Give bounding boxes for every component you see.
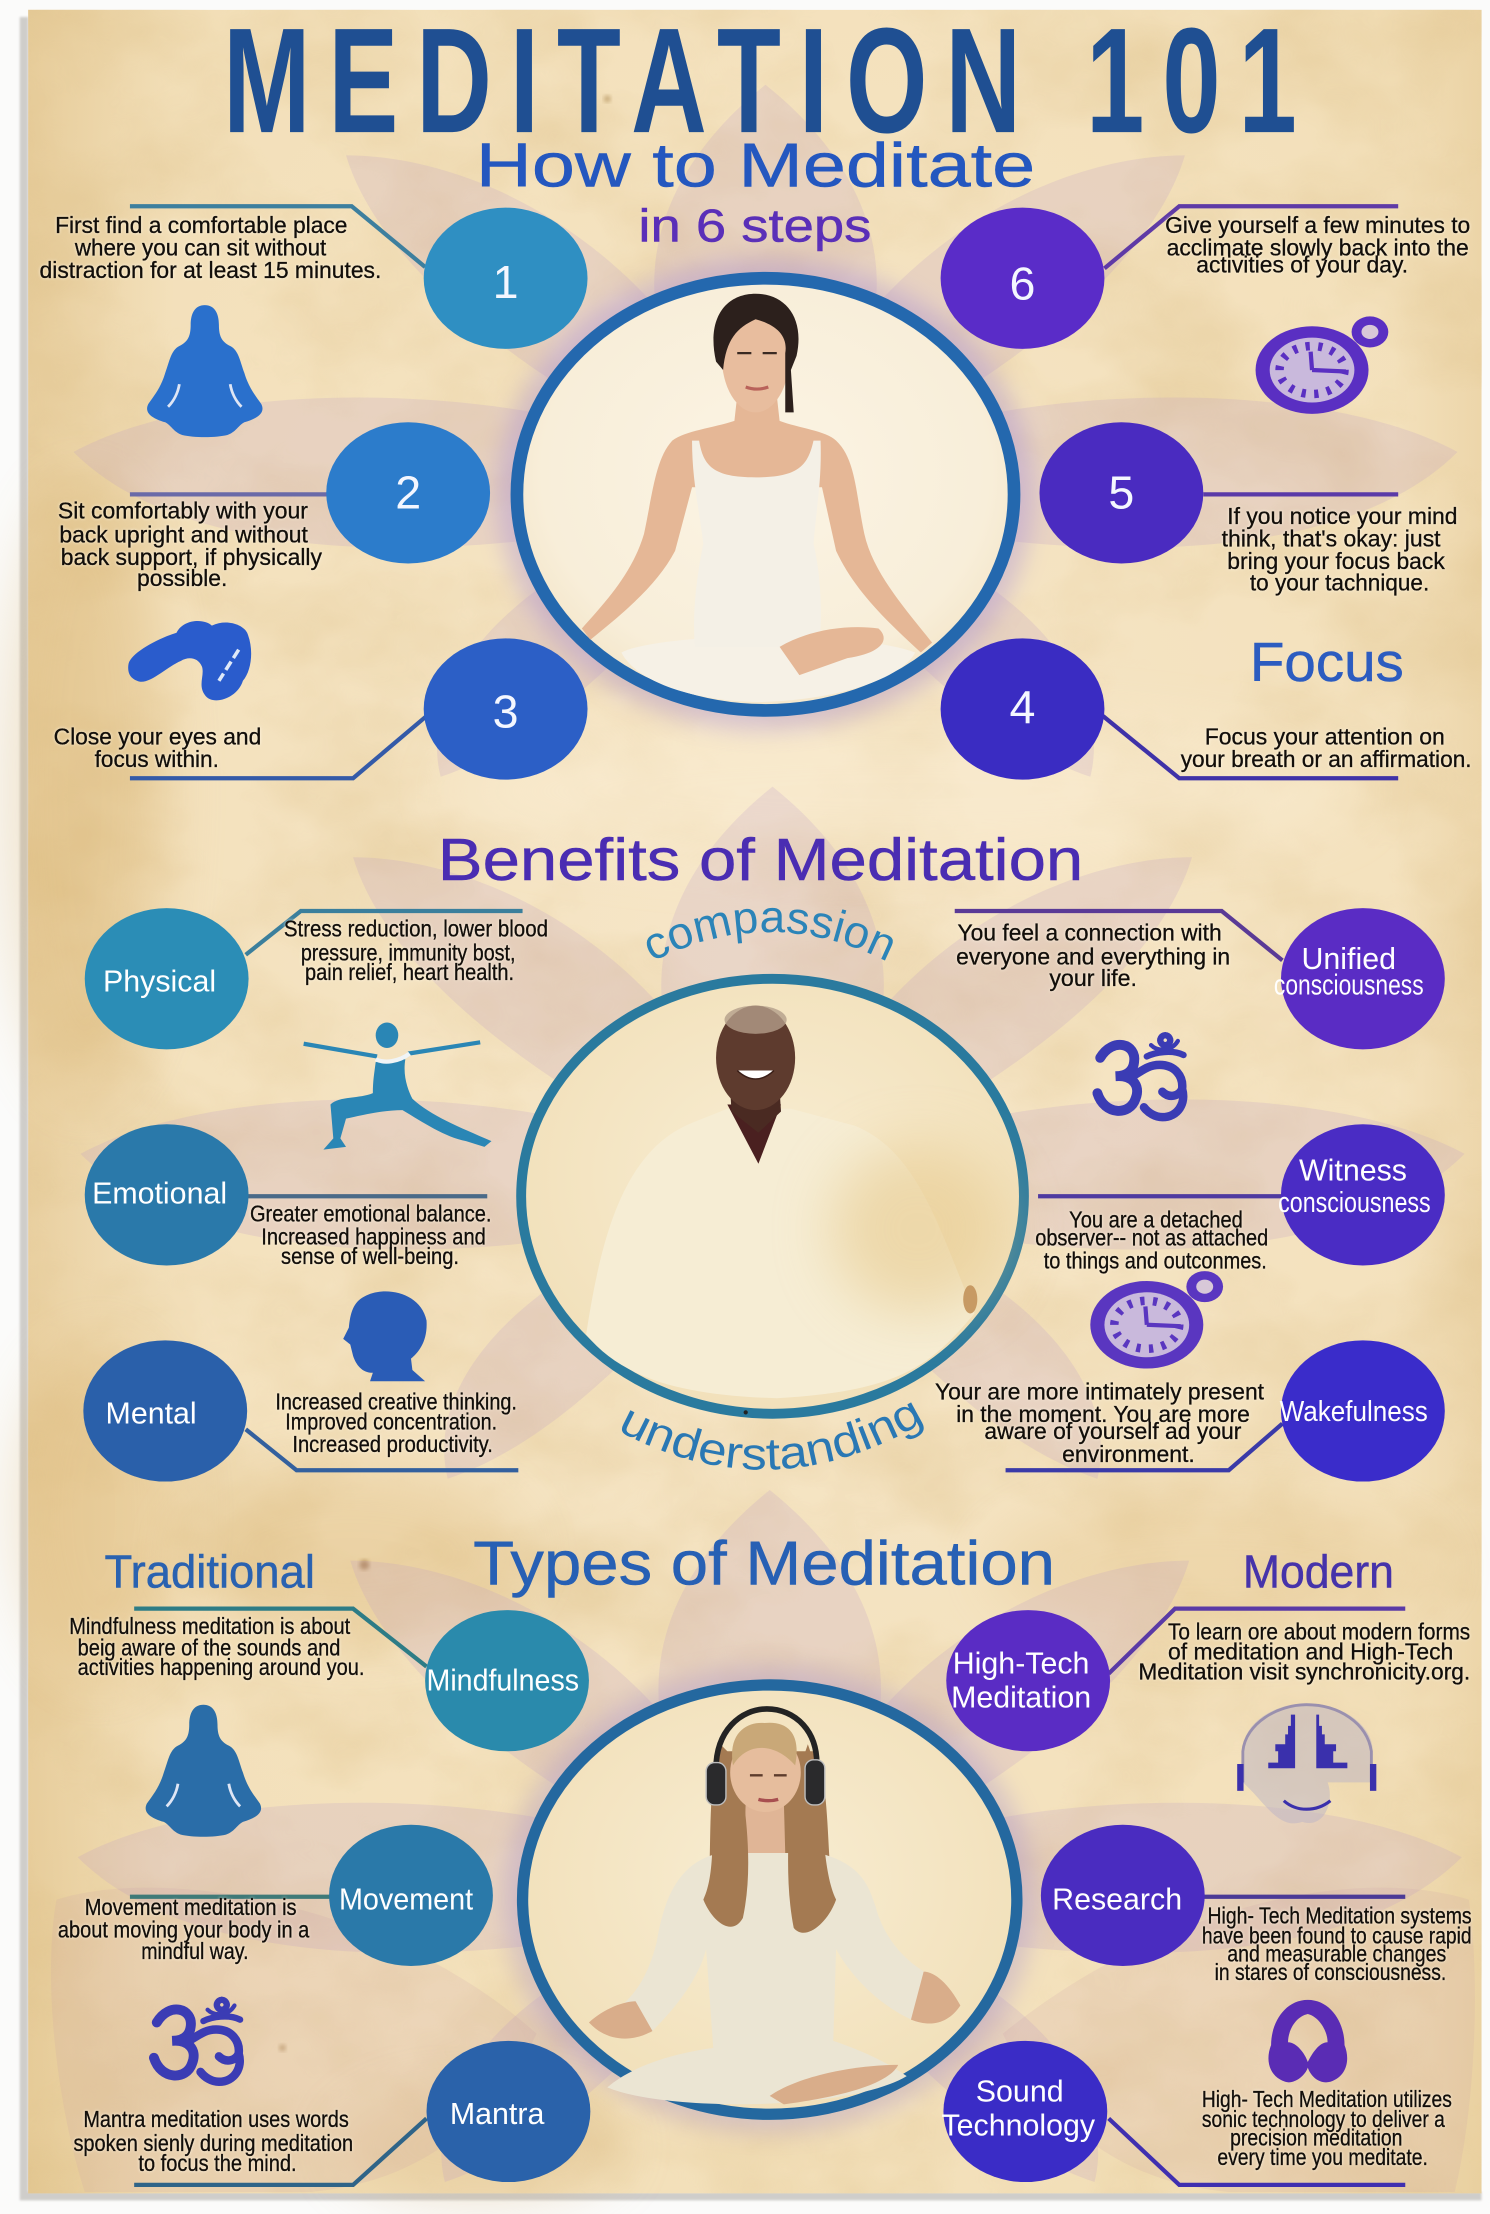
physical text: Stress reduction, lower blood: [284, 915, 548, 941]
physical: [85, 908, 523, 1049]
step 5 text: to your tachnique.: [1250, 569, 1429, 595]
step 6 text: Give yourself a few minutes to: [1165, 212, 1470, 238]
heading: traditional: Traditional: [105, 1545, 315, 1597]
lotus backdrop: top section: [73, 85, 1458, 777]
emotional text: [250, 1201, 491, 1269]
witness text: [1035, 1206, 1268, 1273]
research text: and measurable changes: [1227, 1941, 1446, 1967]
icon: headphones: [1268, 2000, 1347, 2082]
emotional: [85, 1124, 487, 1265]
mindfulness text: activities happening around you.: [78, 1654, 364, 1680]
witness consciousness: consciousness: [1278, 1186, 1431, 1218]
step 4: [941, 638, 1398, 780]
wakefulness text: [935, 1379, 1265, 1467]
icon: om symbol: [1097, 1035, 1184, 1117]
step 6 text: acclimate slowly back into the: [1167, 235, 1469, 261]
mindfulness text: Mindfulness meditation is about: [69, 1613, 351, 1639]
emotional: Emotional: [92, 1177, 227, 1210]
icon: headset with sound bars: [1237, 1703, 1376, 1823]
sound text: [1202, 2086, 1452, 2170]
movement: Movement: [339, 1883, 474, 1916]
sound technology: Sound: [976, 2076, 1064, 2109]
icon: head profile: [343, 1291, 427, 1381]
step 2 text: back upright and without: [59, 521, 308, 547]
curved label: understanding: understanding: [622, 1402, 924, 1470]
step 1 text: [40, 212, 381, 283]
mindfulness: [134, 1609, 589, 1751]
mantra: [134, 2041, 590, 2185]
witness consciousness: [1038, 1124, 1445, 1265]
wakefulness: [1006, 1340, 1445, 1482]
high-tech text: [1138, 1619, 1470, 1684]
panel: benefits: [83, 908, 1445, 1482]
step 2: 2: [395, 466, 421, 518]
step 3 text: focus within.: [95, 746, 219, 772]
step 3 text: Close your eyes and: [54, 723, 261, 749]
mindfulness text: [69, 1613, 364, 1680]
mental text: Increased productivity.: [292, 1431, 493, 1457]
witness consciousness: Witness: [1299, 1155, 1407, 1188]
step 2 text: possible.: [137, 565, 227, 591]
movement text: Movement meditation is: [85, 1894, 297, 1920]
research text: in stares of consciousness.: [1215, 1959, 1446, 1985]
step 5 text: bring your focus back: [1227, 548, 1445, 574]
step 4 text: [1181, 723, 1472, 772]
step 6: [941, 206, 1398, 349]
physical text: pain relief, heart health.: [305, 959, 514, 985]
step 6 text: [1165, 212, 1470, 278]
heading: how to meditate: How to Meditate: [476, 131, 1035, 200]
heading: focus: Focus: [1250, 631, 1404, 693]
wakefulness text: in the moment. You are more: [956, 1401, 1250, 1427]
unified consciousness: [955, 908, 1445, 1049]
icon: stopwatch: [1256, 316, 1388, 414]
unified consciousness: consciousness: [1274, 968, 1424, 1000]
icon: warrior yoga pose: [304, 1023, 491, 1150]
mental text: Improved concentration.: [285, 1408, 497, 1434]
unified text: your life.: [1049, 965, 1137, 991]
step 5: [1039, 422, 1398, 564]
witness text: You are a detached: [1069, 1206, 1243, 1232]
mindfulness: Mindfulness: [427, 1665, 579, 1698]
step 1 text: distraction for at least 15 minutes.: [40, 257, 381, 283]
witness text: to things and outconmes.: [1044, 1247, 1267, 1273]
curved label: compassion: compassion: [646, 908, 893, 960]
step 5 text: If you notice your mind: [1227, 503, 1458, 529]
wakefulness text: Your are more intimately present: [935, 1379, 1265, 1405]
central photo: meditating woman: [497, 258, 1034, 730]
physical text: [284, 915, 548, 985]
mantra text: Mantra meditation uses words: [83, 2106, 349, 2132]
step 5: 5: [1108, 466, 1134, 518]
sound text: every time you meditate.: [1217, 2144, 1428, 2170]
title: MEDITATION 101: [223, 0, 1297, 165]
icon: seated meditator: [147, 305, 263, 437]
step 6: 6: [1010, 257, 1035, 309]
heading: modern: Modern: [1243, 1545, 1394, 1597]
high-tech text: of meditation and High-Tech: [1168, 1639, 1453, 1665]
step 2 text: Sit comfortably with your: [58, 497, 308, 523]
lotus backdrop: middle section: [81, 787, 1465, 1479]
step 2 text: [58, 497, 322, 591]
icon: stopwatch: [1090, 1271, 1223, 1369]
icon: seated meditator: [146, 1705, 261, 1837]
sound text: precision meditation: [1230, 2124, 1402, 2150]
icon: binoculars: [128, 621, 251, 700]
mantra text: [73, 2106, 353, 2176]
mental: [83, 1340, 518, 1482]
icon: om symbol: [154, 2000, 240, 2082]
wakefulness text: environment.: [1062, 1441, 1195, 1467]
sound text: sonic technology to deliver a: [1202, 2106, 1445, 2132]
central photo: smiling man: [521, 979, 1024, 1414]
panel: how to meditate: [40, 206, 1472, 780]
mantra: Mantra: [450, 2098, 544, 2131]
physical: Physical: [103, 965, 216, 998]
emotional text: Greater emotional balance.: [250, 1201, 491, 1227]
step 1 text: First find a comfortable place: [55, 212, 347, 238]
step 1: [130, 206, 588, 349]
mental text: Increased creative thinking.: [275, 1389, 517, 1415]
unified text: You feel a connection with: [958, 920, 1222, 946]
high-tech meditation: High-Tech: [953, 1648, 1089, 1681]
unified text: everyone and everything in: [956, 944, 1230, 970]
witness text: observer-- not as attached: [1035, 1225, 1268, 1251]
movement: [130, 1825, 493, 1966]
unified text: [956, 920, 1230, 991]
mantra text: to focus the mind.: [138, 2150, 297, 2176]
unified consciousness: Unified: [1302, 943, 1396, 976]
step 6 text: activities of your day.: [1196, 252, 1408, 278]
heading: types of meditation: Types of Meditation: [473, 1530, 1055, 1599]
research: [1041, 1825, 1405, 1966]
high-tech text: Meditation visit synchronicity.org.: [1138, 1658, 1470, 1684]
step 2 text: back support, if physically: [61, 544, 322, 570]
step 2: [130, 422, 490, 564]
physical text: pressure, immunity bost,: [301, 939, 515, 965]
high-tech meditation: [946, 1609, 1405, 1751]
lotus backdrop: bottom section: [51, 1490, 1475, 2192]
step 1: 1: [493, 256, 519, 308]
emotional text: Increased happiness and: [261, 1223, 486, 1249]
research text: [1202, 1903, 1472, 1985]
movement text: mindful way.: [141, 1938, 249, 1964]
step 3: [130, 638, 588, 780]
mantra text: spoken sienly during meditation: [73, 2130, 353, 2156]
heading: in 6 steps: in 6 steps: [638, 200, 871, 252]
step 5 text: [1222, 503, 1458, 595]
mental text: [275, 1389, 517, 1457]
step 3 text: [54, 723, 261, 772]
step 4 text: Focus your attention on: [1205, 723, 1445, 749]
movement text: [58, 1894, 309, 1964]
heading: benefits of meditation: Benefits of Meditation: [438, 826, 1083, 893]
research: Research: [1052, 1883, 1182, 1916]
central photo: woman with headphones: [504, 1667, 1035, 2133]
mindfulness text: beig aware of the sounds and: [78, 1634, 340, 1660]
step 5 text: think, that's okay: just: [1222, 526, 1441, 552]
mental: Mental: [106, 1398, 197, 1431]
wakefulness text: aware of yourself ad your: [984, 1418, 1242, 1444]
step 4 text: your breath or an affirmation.: [1181, 746, 1472, 772]
step 4: 4: [1010, 681, 1035, 733]
step 1 text: where you can sit without: [74, 235, 327, 261]
high-tech meditation: Meditation: [951, 1682, 1091, 1715]
movement text: about moving your body in a: [58, 1917, 309, 1943]
wakefulness: Wakefulness: [1280, 1395, 1428, 1427]
emotional text: sense of well-being.: [281, 1243, 459, 1269]
panel: types: [58, 1609, 1472, 2185]
step 3: 3: [493, 685, 519, 737]
sound technology: Technology: [941, 2109, 1096, 2142]
sound technology: [941, 2041, 1405, 2185]
